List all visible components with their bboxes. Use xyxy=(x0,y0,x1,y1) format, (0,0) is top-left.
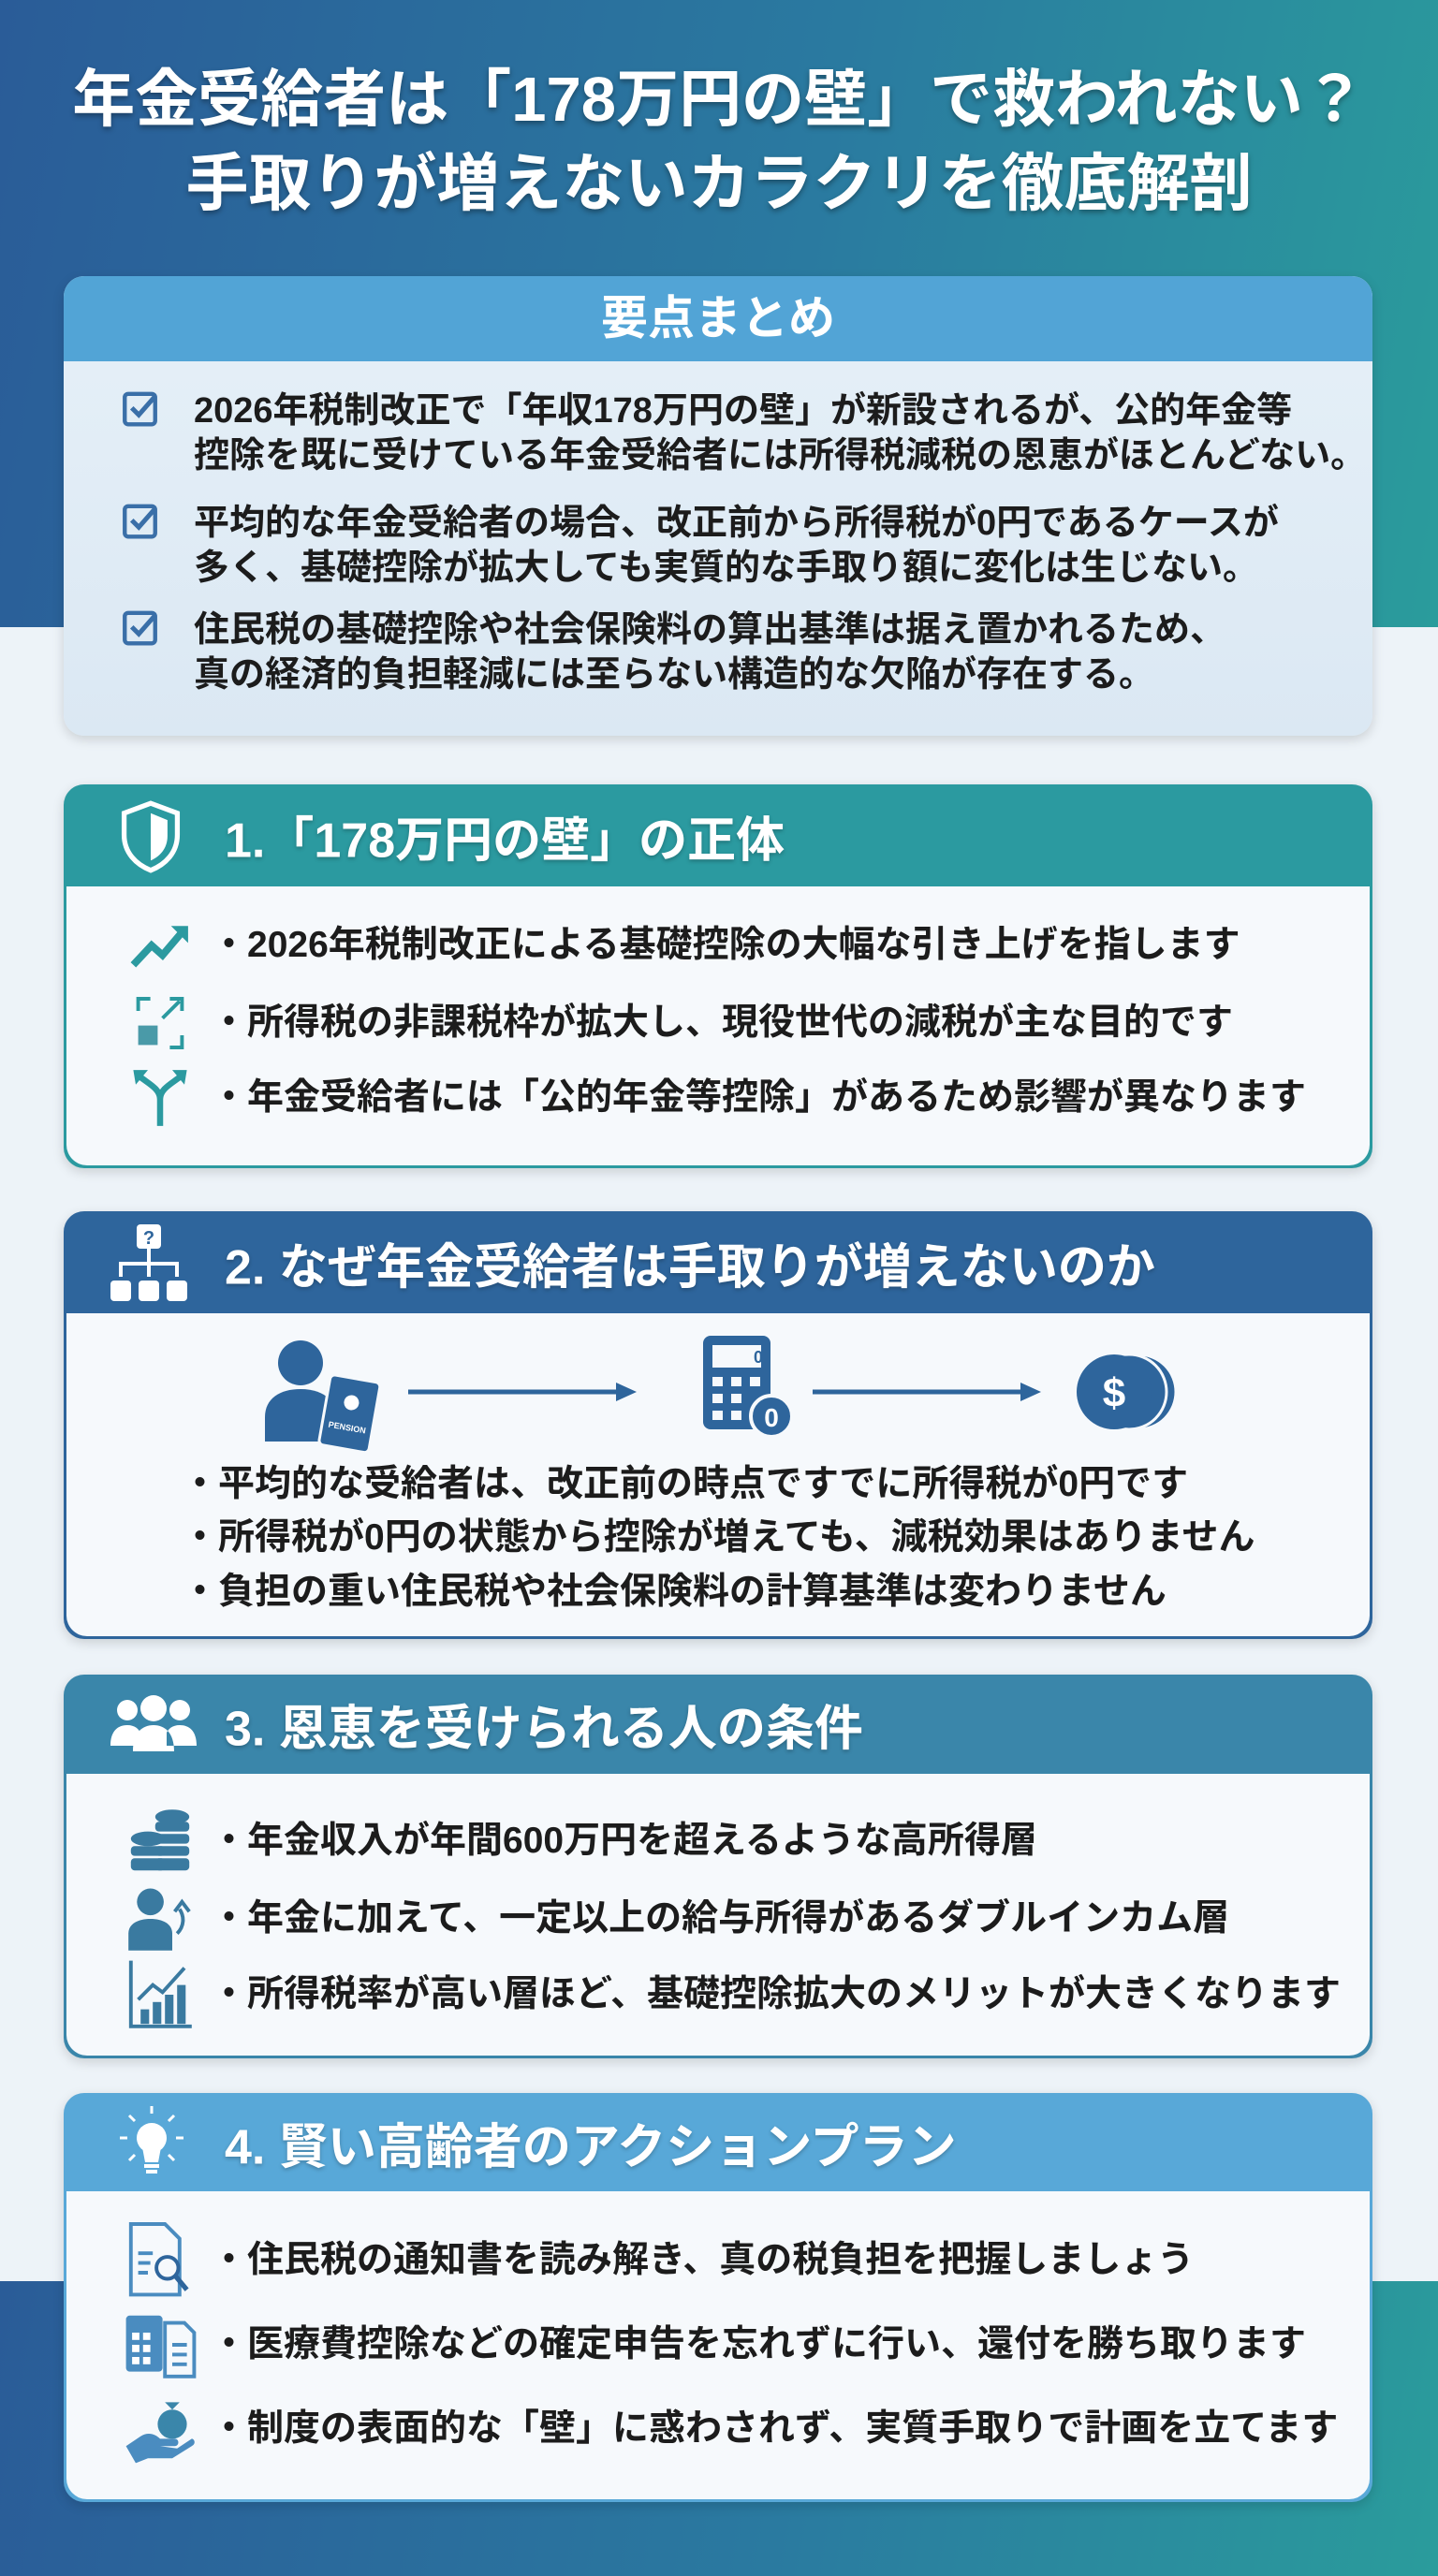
title xyxy=(72,65,1366,219)
icon: expand xyxy=(137,997,183,1049)
title: 手取りが増えないカラクリを徹底解剖 xyxy=(185,149,1253,219)
panel: section 2 xyxy=(64,1211,1372,1639)
summary item 1 xyxy=(123,391,1366,476)
icon: calculator zero: 0 xyxy=(764,1403,779,1432)
section 4 heading: 4. 賢い高齢者のアクションプラン xyxy=(225,2120,957,2174)
section 4 heading xyxy=(120,2106,957,2174)
section 3 heading: 3. 恩恵を受けられる人の条件 xyxy=(225,1702,863,1756)
summary heading: 要点まとめ xyxy=(601,292,835,344)
item 1-2: ・所得税の非課税枠が拡大し、現役世代の減税が主な目的です xyxy=(211,1003,1233,1043)
icon: hierarchy: ? xyxy=(143,1228,154,1249)
item 3-2: ・年金に加えて、一定以上の給与所得があるダブルインカム層 xyxy=(211,1898,1229,1939)
icon: lightbulb xyxy=(120,2106,183,2174)
summary item 3 xyxy=(123,610,1225,695)
panel: summary xyxy=(64,276,1372,736)
section 1 heading xyxy=(122,800,785,873)
arrow xyxy=(408,1383,637,1401)
item 4-3: ・制度の表面的な「壁」に惑わされず、実質手取りで計画を立てます xyxy=(211,2408,1338,2449)
icon: coin stacks xyxy=(131,1809,189,1870)
icon: pensioner xyxy=(265,1340,378,1451)
icon: calculator document xyxy=(125,2316,197,2378)
item 3-3: ・所得税率が高い層ほど、基礎控除拡大のメリットが大きくなります xyxy=(211,1974,1341,2014)
item 2-1: ・平均的な受給者は、改正前の時点ですでに所得税が0円です xyxy=(182,1464,1188,1504)
icon: bar chart xyxy=(129,1960,192,2028)
icon: shield xyxy=(122,800,180,873)
summary heading xyxy=(64,276,1372,361)
title: 年金受給者は「178万円の壁」で救われない？ xyxy=(72,65,1366,135)
icon: document search xyxy=(129,2222,189,2297)
icon: coins xyxy=(1077,1354,1174,1429)
panel: section 4 xyxy=(64,2093,1372,2502)
section 2 heading: 2. なぜ年金受給者は手取りが増えないのか xyxy=(225,1240,1155,1295)
icon: hierarchy xyxy=(110,1224,187,1301)
item 2-2: ・所得税が0円の状態から控除が増えても、減税効果はありません xyxy=(182,1517,1255,1558)
icon: group xyxy=(110,1695,197,1751)
icon: coins: $ xyxy=(1103,1370,1125,1416)
item 1-1: ・2026年税制改正による基礎控除の大幅な引き上げを指します xyxy=(211,925,1240,965)
panel: section 3 xyxy=(64,1675,1372,2058)
icon: person up xyxy=(128,1889,191,1951)
flow diagram xyxy=(265,1336,1174,1451)
section 2 heading xyxy=(110,1224,1155,1301)
summary item 2: 多く、基礎控除が拡大しても実質的な手取り額に変化は生じない。 xyxy=(194,549,1258,588)
item 3-1: ・年金収入が年間600万円を超えるような高所得層 xyxy=(211,1821,1037,1861)
icon: calculator zero xyxy=(703,1336,790,1435)
summary item 2 xyxy=(123,504,1279,588)
icon: hand with money bag xyxy=(125,2402,195,2464)
item 2-3: ・負担の重い住民税や社会保険料の計算基準は変わりません xyxy=(182,1572,1167,1612)
icon: split arrow xyxy=(133,1070,187,1126)
icon: trend up xyxy=(131,926,188,968)
item 4-2: ・医療費控除などの確定申告を忘れずに行い、還付を勝ち取ります xyxy=(211,2324,1306,2364)
summary item 3: 真の経済的負担軽減には至らない構造的な欠陥が存在する。 xyxy=(194,655,1154,695)
summary item 1: 控除を既に受けている年金受給者には所得税減税の恩恵がほとんどない。 xyxy=(194,436,1366,476)
panel: section 1 xyxy=(64,784,1372,1168)
item 4-1: ・住民税の通知書を読み解き、真の税負担を把握しましょう xyxy=(211,2240,1194,2280)
item 1-3: ・年金受給者には「公的年金等控除」があるため影響が異なります xyxy=(211,1077,1306,1118)
icon: calculator zero: 0 xyxy=(754,1348,763,1367)
summary item 2: 平均的な年金受給者の場合、改正前から所得税が0円であるケースが xyxy=(194,504,1279,543)
icon: pensioner: PENSION xyxy=(328,1420,367,1436)
section 1 heading: 1.「178万円の壁」の正体 xyxy=(225,813,785,868)
summary item 3: 住民税の基礎控除や社会保険料の算出基準は据え置かれるため、 xyxy=(194,610,1225,650)
arrow xyxy=(813,1383,1041,1401)
summary item 1: 2026年税制改正で「年収178万円の壁」が新設されるが、公的年金等 xyxy=(194,391,1292,431)
